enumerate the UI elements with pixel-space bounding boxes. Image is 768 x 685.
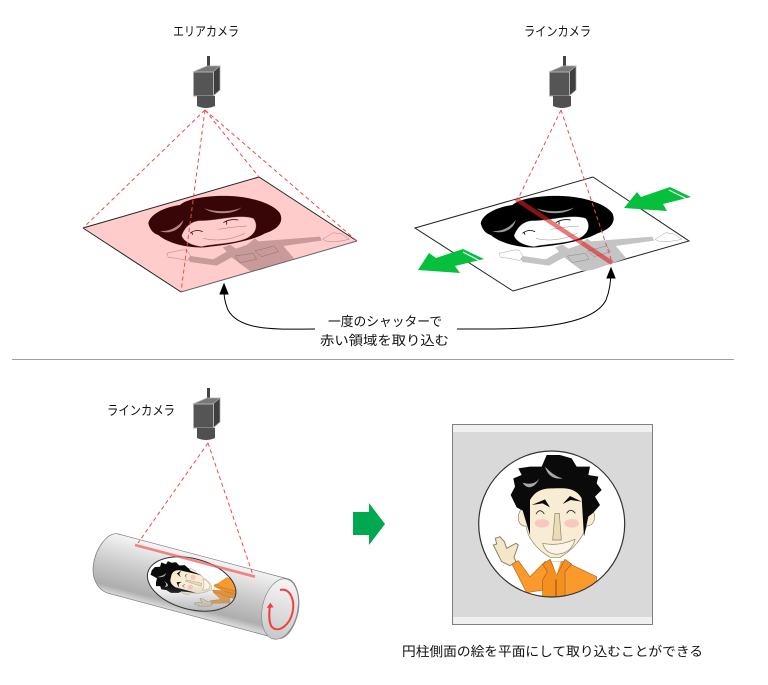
arrow: callout to line sheet: [457, 268, 615, 329]
panel: flattened image: [452, 424, 652, 624]
panel: area camera sheet: [83, 177, 357, 292]
icon: line camera: [549, 56, 576, 108]
icon: area camera: [193, 56, 220, 108]
title: lower line camera: ラインカメラ: [107, 403, 175, 418]
callout text: 一度のシャッターで: [328, 314, 442, 329]
arrow: callout to area sheet: [220, 284, 315, 329]
area camera field-of-view lines: [83, 110, 357, 292]
caption: 円柱側面の絵を平面にして取り込むことができる: [402, 644, 703, 659]
arrow: big green: [353, 503, 385, 545]
arrow: green motion left sheet: [418, 249, 484, 273]
line camera scan line and field-of-view lines: [516, 110, 612, 263]
title: line camera: ラインカメラ: [524, 24, 591, 39]
panel: line camera sheet: [415, 177, 689, 291]
title: area camera: エリアカメラ: [173, 24, 239, 39]
lower camera field-of-view lines: [138, 443, 253, 575]
cylinder with rotated picture: [93, 534, 304, 643]
arrow: green motion right sheet: [624, 187, 691, 211]
icon: lower line camera: [193, 388, 220, 440]
callout text: [320, 314, 449, 348]
callout text: 赤い領域を取り込む: [320, 333, 449, 348]
